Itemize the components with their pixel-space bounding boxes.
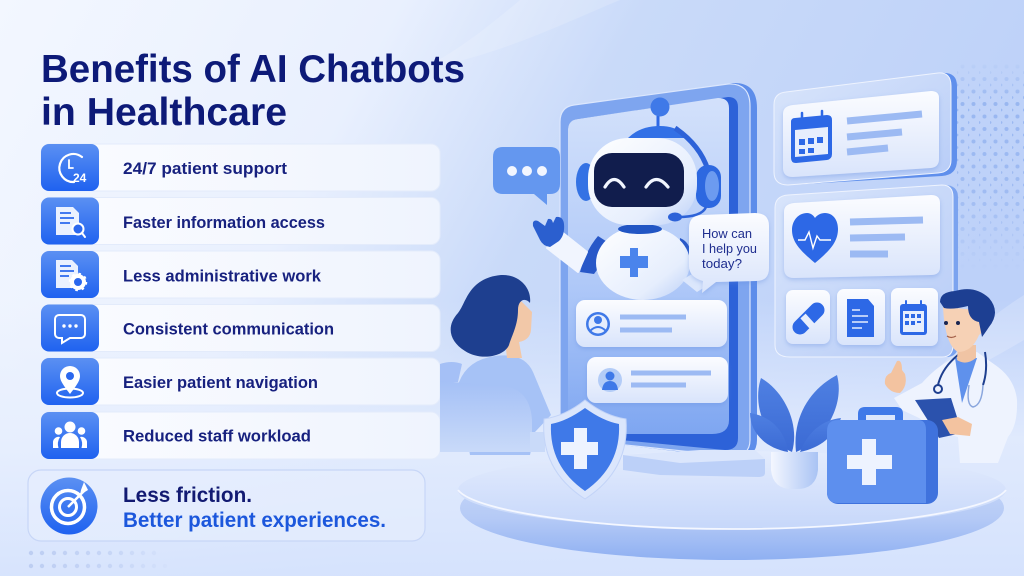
benefit row: easier patient navigation: Easier patient navigation	[123, 373, 318, 392]
doctor	[885, 289, 1017, 463]
benefit row: less administrative work: Less administrative work	[123, 266, 322, 286]
robot antenna	[628, 98, 688, 138]
benefit row: 24/7 patient support	[41, 144, 440, 191]
icon: calendar	[791, 111, 832, 163]
benefit row: faster information access	[41, 198, 440, 244]
tile: bandage	[786, 290, 830, 344]
callout: less friction	[28, 470, 425, 541]
icon: heart	[792, 213, 838, 263]
speech bubble: typing dots	[493, 147, 560, 205]
title: in Healthcare	[41, 91, 287, 134]
benefit row: 24/7 patient support: 24	[73, 171, 87, 185]
patient torso	[458, 355, 551, 455]
tile: calendar	[891, 288, 938, 346]
robot head	[576, 138, 721, 225]
chat card: first message	[576, 300, 727, 347]
benefit row: 24/7 patient support: 24/7 patient support	[123, 159, 287, 178]
speech bubble: how can I help you today: I help you	[702, 242, 757, 256]
icon: target	[40, 478, 98, 534]
patient hair	[451, 275, 530, 357]
patient face	[505, 295, 532, 358]
phone	[560, 83, 757, 458]
robot left arm	[533, 217, 612, 274]
decorative dots	[28, 550, 145, 568]
clipboard	[915, 398, 962, 438]
benefit row: easier patient navigation	[41, 358, 440, 405]
stethoscope	[934, 352, 986, 407]
hand thumbs up	[885, 361, 906, 393]
doctor hand on clipboard	[942, 417, 972, 436]
doctor hair	[940, 289, 995, 337]
patient	[440, 275, 551, 455]
title: Benefits of AI Chatbots	[41, 48, 465, 91]
platform	[458, 451, 1006, 560]
pot	[771, 452, 818, 489]
benefit row: faster information access: Faster information access	[123, 213, 325, 232]
robot body	[596, 224, 690, 300]
callout: less friction: Less friction.	[123, 483, 252, 507]
doctor eyes and smile	[944, 321, 960, 338]
shield	[544, 400, 626, 499]
plant	[750, 375, 841, 489]
doctor coat	[894, 352, 1017, 463]
benefit row: consistent communication	[41, 304, 440, 352]
title	[41, 48, 465, 134]
benefit row: reduced staff workload: Reduced staff workload	[123, 426, 311, 446]
first aid kit	[827, 407, 938, 504]
speech bubble: how can I help you today: today?	[702, 257, 742, 271]
benefit row: less administrative work	[41, 251, 440, 298]
callout: less friction: Better patient experiences.	[123, 509, 386, 532]
armchair	[440, 381, 532, 452]
speech bubble: how can I help you today: How can	[702, 227, 752, 241]
benefit row: reduced staff workload	[41, 412, 440, 459]
tile: document	[837, 289, 885, 345]
armchair back	[440, 362, 462, 382]
benefit row: consistent communication: Consistent communication	[123, 320, 334, 338]
phone stand	[623, 450, 765, 477]
doctor face	[943, 307, 984, 352]
chat card: second message	[587, 357, 728, 403]
benefits list	[41, 144, 440, 459]
panel: appointment card	[774, 73, 957, 185]
robot	[533, 98, 721, 300]
doctor neck	[957, 345, 976, 363]
panel: health records	[775, 185, 958, 357]
speech bubble: how can I help you today	[689, 213, 769, 293]
doctor shirt	[955, 358, 977, 403]
leaves	[750, 375, 841, 452]
